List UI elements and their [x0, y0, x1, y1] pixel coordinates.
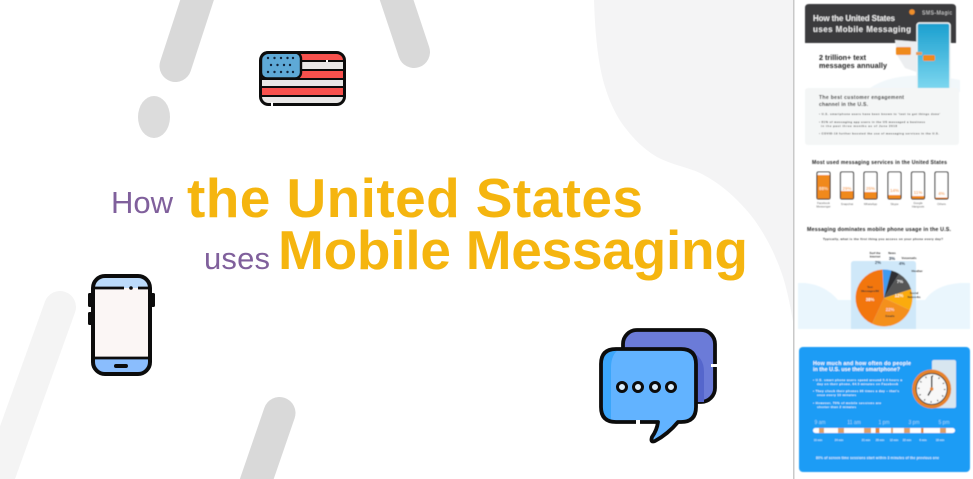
icon: clock	[912, 360, 956, 408]
panel: best engagement channel	[805, 88, 959, 145]
chart: first thing accessed pie: Typically, what is the first thing you access on your phone every day?	[823, 237, 943, 241]
chart: first thing accessed pie: Weather	[911, 269, 924, 273]
title: the United States	[187, 167, 643, 229]
panel: smartphone usage: • U.S. smart phone users spend around 5.4 hours a	[813, 378, 902, 382]
chart: first thing accessed pie: 3%	[889, 256, 895, 261]
panel: smartphone usage: day on their phone, 64.5 minutes on Facebook	[817, 382, 898, 386]
chart: first thing accessed pie: 12%	[895, 293, 903, 298]
map and phone illustration	[870, 23, 960, 92]
timeline: 24 min	[835, 438, 844, 442]
chart: first thing accessed pie: Networks	[907, 295, 921, 299]
chart: first thing accessed pie: Voicemails	[902, 256, 917, 260]
chart: most used messaging services: WhatsApp	[864, 202, 878, 206]
icon: chat bubbles	[600, 330, 717, 444]
timeline: 5 pm	[938, 420, 950, 426]
chart: most used messaging services: Others	[937, 202, 946, 206]
panel: best engagement channel: • U.S. smartphone users have been known to 'text to get things done'	[819, 112, 940, 116]
header band: How the United States	[813, 14, 896, 23]
panel: infographic thumbnail	[793, 0, 973, 479]
icon: smartphone	[88, 276, 155, 375]
panel: best engagement channel: in the past three months as of June 2018	[821, 124, 897, 128]
timeline: 9 am	[814, 420, 826, 426]
chart: first thing accessed pie: 38%	[866, 297, 874, 302]
chart: first thing accessed pie: Emails	[885, 314, 895, 318]
panel: smartphone usage: How much and how often do people	[813, 361, 911, 367]
panel: smartphone usage: • However, 70% of mobile sessions are	[813, 401, 881, 405]
header band	[805, 4, 956, 43]
timeline: 3 pm	[908, 420, 920, 426]
chart: most used messaging services: 88%	[819, 186, 828, 191]
timeline: 10 min	[814, 438, 823, 442]
chart: most used messaging services: Most used messaging services in the United States	[812, 160, 947, 166]
timeline: 21 min	[862, 438, 871, 442]
chart: first thing accessed pie: Internet	[870, 254, 880, 258]
timeline	[813, 420, 955, 442]
chart: first thing accessed pie: Surf the	[870, 251, 881, 255]
chart: most used messaging services: 29%	[842, 186, 852, 191]
decorative strokes	[0, 0, 414, 479]
timeline: 12 min	[890, 438, 899, 442]
icon: US flag	[260, 52, 345, 106]
panel: best engagement channel: • 81% of messaging app users in the US messaged a business	[819, 120, 925, 124]
stat: text messages	[819, 53, 887, 70]
panel: smartphone usage: 80% of screen time sessions start within 3 minutes of the previous one	[816, 456, 939, 460]
chart: most used messaging services: 25%	[866, 186, 875, 191]
timeline: 18 min	[936, 438, 945, 442]
chart: first thing accessed pie: Social	[910, 291, 918, 295]
header band: uses Mobile Messaging	[813, 25, 911, 34]
chart: most used messaging services: Google	[913, 201, 923, 205]
timeline: 1 pm	[878, 420, 890, 426]
panel: smartphone usage: in the U.S. use their smartphone?	[813, 367, 900, 373]
title	[111, 167, 748, 281]
chart: first thing accessed pie: 22%	[886, 307, 894, 312]
chart: first thing accessed pie: 7%	[897, 279, 903, 284]
background blob	[594, 0, 794, 327]
panel: best engagement channel: channel in the U.S.	[819, 102, 869, 108]
title: Mobile Messaging	[278, 219, 748, 281]
title: How	[111, 185, 174, 220]
stat: text messages: messages annually	[819, 61, 887, 70]
chart: first thing accessed pie	[798, 227, 970, 329]
chart: first thing accessed pie: News	[888, 251, 896, 255]
panel: smartphone usage: shorter than 2 minutes	[817, 405, 856, 409]
chart: first thing accessed pie: Messages/IM	[861, 289, 880, 293]
panel: smartphone usage: • They check their phones 96 times a day – that's	[813, 389, 899, 393]
panel: best engagement channel: The best customer engagement	[819, 95, 904, 101]
chart: most used messaging services	[812, 160, 948, 208]
chart: most used messaging services: 4%	[938, 191, 945, 196]
chart: first thing accessed pie: 2%	[875, 260, 881, 265]
panel: smartphone usage: once every 10 minutes	[817, 393, 856, 397]
timeline: 28 min	[876, 438, 885, 442]
chart: most used messaging services: Hangouts	[912, 204, 925, 208]
timeline: 22 min	[903, 438, 912, 442]
chart: most used messaging services: Snapchat	[841, 202, 853, 206]
header band: SMS-Magic	[922, 10, 952, 16]
chart: most used messaging services: 11%	[914, 190, 922, 195]
chart: most used messaging services: 14%	[890, 188, 899, 193]
stat: text messages: 2 trillion+ text	[819, 53, 867, 62]
chart: most used messaging services: Facebook	[817, 201, 830, 205]
chart: most used messaging services: Skype	[890, 202, 899, 206]
chart: first thing accessed pie: 4%	[899, 261, 905, 266]
chart: first thing accessed pie: Messaging dominates mobile phone usage in the U.S.	[807, 227, 952, 233]
chart: most used messaging services: Messenger	[816, 204, 831, 208]
panel: smartphone usage	[799, 347, 970, 472]
timeline: 11 am	[847, 420, 861, 426]
timeline: 6 min	[919, 438, 927, 442]
panel: best engagement channel: • COVID-19 further boosted the use of messaging services in the U.S.	[819, 132, 939, 136]
title: uses	[204, 241, 270, 276]
chart: first thing accessed pie: Text	[867, 285, 873, 289]
